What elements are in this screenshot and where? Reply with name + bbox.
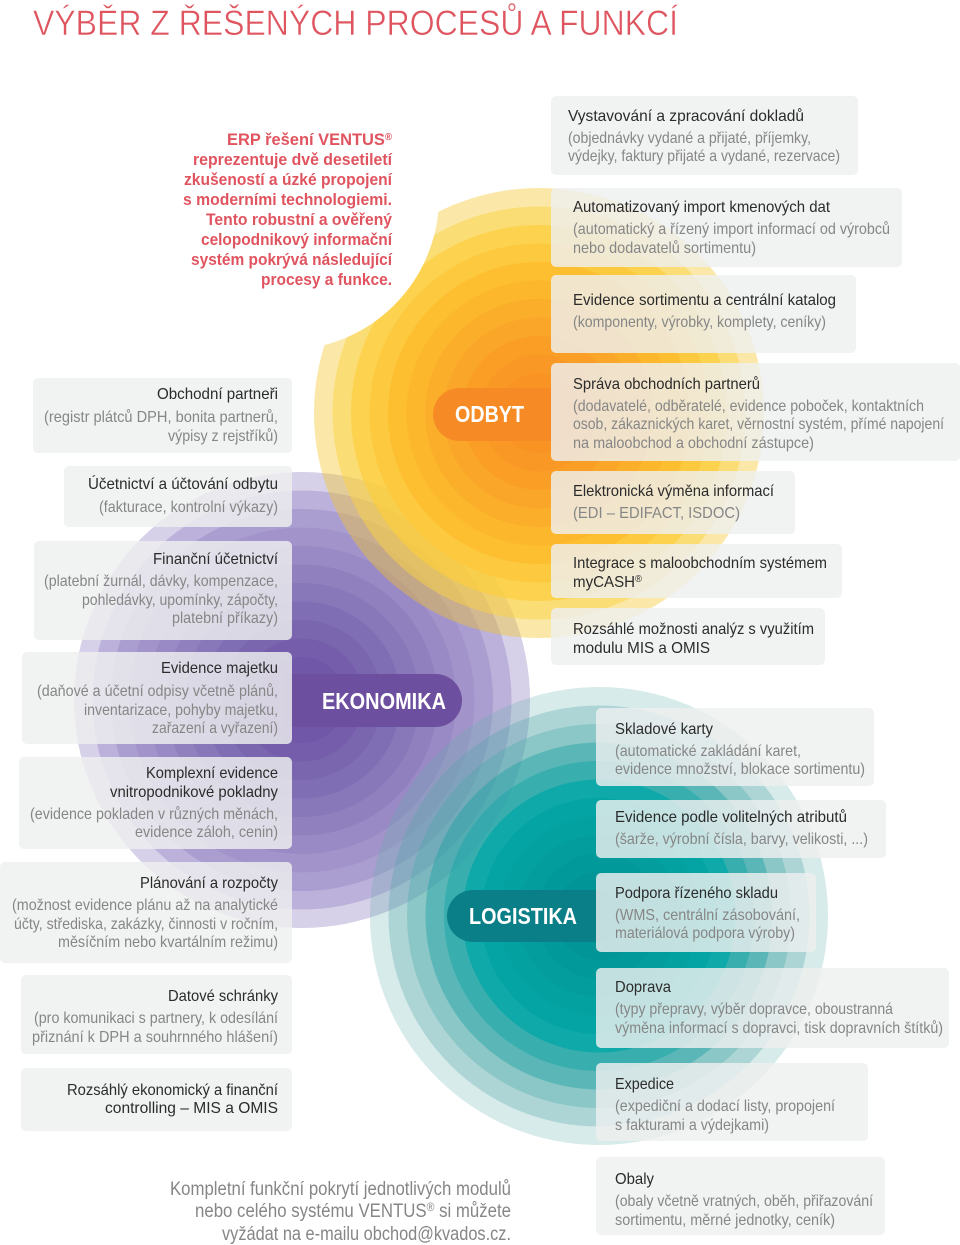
intro text: reprezentuje dvě desetiletí — [193, 150, 393, 169]
intro text: ERP řešení VENTUS — [227, 130, 390, 149]
panel: Obchodní partneři: Obchodní partneři — [157, 386, 278, 403]
panel: Vystavování a zpracování dokladů: (objednávky vydané a přijaté, příjemky, — [568, 130, 811, 147]
panel: Doprava: (typy přepravy, výběr dopravce, oboustranná — [615, 1001, 893, 1018]
pill: LOGISTIKA — [447, 890, 600, 942]
panel: Vystavování a zpracování dokladů: výdejky, faktury přijaté a vydané, rezervace) — [568, 148, 840, 165]
circle: ekonomika — [74, 472, 530, 928]
panel: Komplexní evidence — [19, 757, 292, 849]
intro text: systém pokrývá následující — [191, 250, 393, 269]
title: VÝBĚR Z ŘEŠENÝCH PROCESŮ A FUNKCÍ — [33, 3, 678, 43]
panel: Integrace s maloobchodním systémem: myCASH — [573, 574, 639, 591]
panel: Skladové karty: Skladové karty — [615, 721, 713, 738]
panel: Rozsáhlý ekonomický a finanční controlling — [21, 1068, 292, 1131]
panel: Evidence majetku: inventarizace, pohyby majetku, — [84, 702, 278, 719]
panel: Komplexní evidence: evidence záloh, cenin) — [135, 824, 278, 841]
footer note — [170, 1179, 511, 1245]
pill: LOGISTIKA: LOGISTIKA — [469, 903, 577, 929]
footer note: ® — [427, 1200, 435, 1214]
panel: Expedice: s fakturami a výdejkami) — [615, 1117, 769, 1134]
panel: Skladové karty: (automatické zakládání karet, — [615, 743, 801, 760]
panel: Komplexní evidence: vnitropodnikové pokladny — [110, 784, 278, 801]
panel: Evidence majetku: Evidence majetku — [161, 660, 278, 677]
panel: Evidence sortimentu a centrální katalog: Evidence sortimentu a centrální katalog — [573, 292, 836, 309]
panel: Finanční účetnictví — [34, 541, 292, 640]
panel: Rozsáhlé možnosti analýz: modulu MIS a OMIS — [573, 640, 710, 657]
panel: Rozsáhlý ekonomický a finanční controlling: Rozsáhlý ekonomický a finanční — [67, 1082, 279, 1099]
panel: Evidence podle volitelných atributů: Evidence podle volitelných atributů — [615, 808, 847, 826]
panel: Rozsáhlé možnosti analýz: Rozsáhlé možnosti analýz s využitím — [573, 621, 814, 638]
panel: Elektronická výměna informací — [551, 471, 795, 534]
intro text: zkušeností a úzké propojení — [184, 170, 393, 189]
pill: ODBYT — [433, 388, 560, 441]
intro text: Tento robustní a ověřený — [206, 210, 392, 229]
footer note: Kompletní funkční pokrytí jednotlivých modulů — [170, 1179, 511, 1200]
panel: Doprava: Doprava — [615, 979, 671, 996]
intro text: procesy a funkce. — [261, 270, 392, 289]
panel: Expedice: Expedice — [615, 1076, 674, 1093]
panel: Obaly: Obaly — [615, 1171, 654, 1188]
panel: Podpora řízeného skladu — [596, 873, 816, 952]
panel: Evidence sortimentu a centrální katalog — [551, 275, 856, 353]
panel: Integrace s maloobchodním systémem: Integrace s maloobchodním systémem — [573, 555, 827, 572]
panel: Rozsáhlý ekonomický a finanční controlling: controlling – MIS a OMIS — [105, 1100, 278, 1117]
pill: EKONOMIKA: EKONOMIKA — [322, 688, 446, 714]
panel: Expedice: (expediční a dodací listy, propojení — [615, 1098, 835, 1115]
panel: Obaly: sortimentu, měrné jednotky, ceník) — [615, 1212, 835, 1229]
panel: Integrace s maloobchodním systémem: ® — [635, 574, 643, 585]
panel: Podpora řízeného skladu: (WMS, centrální zásobování, — [615, 907, 800, 924]
panel: Plánování a rozpočty: účty, střediska, zakázky, činnosti v ročním, — [14, 916, 278, 933]
panel: Plánování a rozpočty — [0, 862, 292, 963]
panel: Datové schránky: přiznání k DPH a souhrnného hlášení) — [32, 1029, 278, 1046]
panel: Komplexní evidence: (evidence pokladen v různých měnách, — [30, 805, 278, 823]
panel: Datové schránky: (pro komunikaci s partnery, k odesílání — [34, 1010, 278, 1027]
intro text: celopodnikový informační — [201, 230, 393, 249]
pill: EKONOMIKA — [285, 674, 462, 727]
panel: Vystavování a zpracování dokladů: Vystavování a zpracování dokladů — [568, 107, 804, 125]
circle: logistika — [370, 687, 828, 1145]
panel: Evidence majetku: (daňové a účetní odpisy včetně plánů, — [37, 682, 278, 700]
panel: Obaly — [596, 1157, 885, 1235]
intro text: s moderními technologiemi. — [183, 190, 392, 209]
panel: Podpora řízeného skladu: materiálová podpora výroby) — [615, 925, 795, 942]
panel: Elektronická výměna informací: (EDI – EDIFACT, ISDOC) — [573, 505, 740, 522]
intro text: ® — [385, 132, 393, 143]
panel: Finanční účetnictví: platební příkazy) — [172, 610, 278, 627]
panel: Účetnictví a účtování odbytu — [64, 466, 292, 527]
panel: Evidence majetku — [22, 652, 292, 744]
panel: Rozsáhlé možnosti analýz — [551, 608, 825, 665]
panel: Evidence podle volitelných atributů — [596, 800, 886, 858]
panel: Plánování a rozpočty: měsíčním nebo kvartálním režimu) — [58, 934, 278, 951]
panel: Datové schránky — [21, 975, 292, 1054]
panel: Účetnictví a účtování odbytu: (fakturace, kontrolní výkazy) — [99, 499, 278, 516]
panel: Podpora řízeného skladu: Podpora řízeného skladu — [615, 885, 778, 902]
panel: Účetnictví a účtování odbytu: Účetnictví a účtování odbytu — [88, 474, 278, 493]
panel: Finanční účetnictví: pohledávky, upomínky, zápočty, — [82, 592, 278, 609]
panel: Správa obchodních partnerů: Správa obchodních partnerů — [573, 375, 760, 393]
panel: Správa obchodních partnerů — [551, 363, 960, 461]
footer note: nebo celého systému VENTUS — [195, 1201, 457, 1222]
panel: Správa obchodních partnerů: na maloobchod a obchodní zástupce) — [573, 435, 814, 452]
panel: Automatizovaný import kmenových dat: (automatický a řízený import informací od výrobců — [573, 220, 890, 238]
panel: Plánování a rozpočty: Plánování a rozpočty — [140, 875, 278, 892]
panel: Evidence majetku: zařazení a vyřazení) — [152, 720, 278, 737]
intro text — [183, 130, 393, 289]
footer note: si můžete — [434, 1201, 511, 1222]
panel: Obchodní partneři — [33, 378, 292, 453]
panel: Skladové karty — [596, 708, 874, 786]
panel: Vystavování a zpracování dokladů — [551, 96, 858, 175]
panel: Expedice — [596, 1063, 868, 1141]
panel: Správa obchodních partnerů: (dodavatelé, odběratelé, evidence poboček, kontaktních — [573, 398, 924, 415]
panel: Obchodní partneři: výpisy z rejstříků) — [168, 427, 278, 445]
panel: Automatizovaný import kmenových dat: Automatizovaný import kmenových dat — [573, 199, 831, 216]
pill: ODBYT: ODBYT — [455, 401, 524, 427]
panel: Finanční účetnictví: Finanční účetnictví — [153, 551, 279, 568]
panel: Komplexní evidence: Komplexní evidence — [146, 765, 278, 782]
panel: Plánování a rozpočty: (možnost evidence plánu až na analytické — [12, 897, 278, 914]
panel: Obchodní partneři: (registr plátců DPH, bonita partnerů, — [44, 408, 278, 426]
panel: Evidence sortimentu a centrální katalog: (komponenty, výrobky, komplety, ceníky) — [573, 314, 826, 331]
panel: Obaly: (obaly včetně vratných, oběh, přiřazování — [615, 1193, 873, 1210]
panel: Doprava — [596, 968, 949, 1048]
panel: Skladové karty: evidence množství, blokace sortimentu) — [615, 761, 865, 778]
circle: odbyt — [133, 44, 764, 638]
panel: Finanční účetnictví: (platební žurnál, dávky, kompenzace, — [44, 573, 278, 590]
footer note: vyžádat na e-mailu obchod@kvados.cz. — [222, 1224, 511, 1245]
panel: Datové schránky: Datové schránky — [168, 988, 278, 1005]
panel: Automatizovaný import kmenových dat: nebo dodavatelů sortimentu) — [573, 239, 756, 257]
panel: Integrace s maloobchodním systémem — [551, 544, 842, 598]
panel: Automatizovaný import kmenových dat — [551, 188, 902, 267]
panel: Evidence podle volitelných atributů: (šarže, výrobní čísla, barvy, velikosti, ...) — [615, 831, 868, 848]
panel: Elektronická výměna informací: Elektronická výměna informací — [573, 483, 775, 500]
